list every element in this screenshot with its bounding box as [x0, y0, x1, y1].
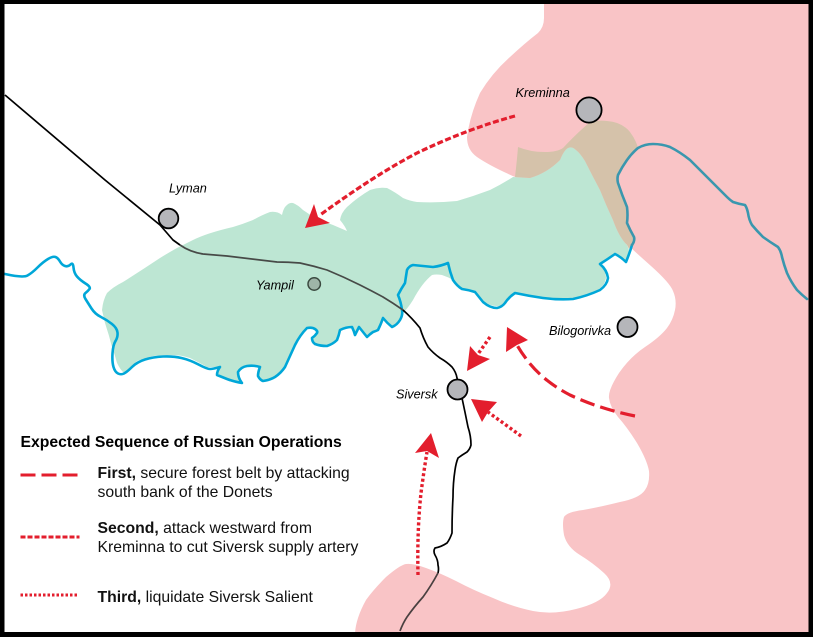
panel: forest belt [102, 147, 629, 382]
arrow: third, from southeast to Siversk [471, 399, 521, 436]
legend swatch: second [20, 536, 80, 538]
city label: Siversk: Siversk [396, 388, 438, 402]
city marker: Bilogorivka [618, 317, 638, 337]
city label: Yampil: Yampil [256, 278, 295, 292]
legend text: first: First, secure forest belt by attacking [98, 465, 350, 482]
Donets river, teal section over occupied area [618, 144, 807, 299]
city label: Lyman: Lyman [169, 182, 207, 196]
legend swatch: third [20, 594, 77, 596]
legend text: first: south bank of the Donets [98, 484, 273, 501]
legend text: second: Second, attack westward from [98, 520, 312, 537]
panel: Russian-held territory [355, 4, 809, 633]
arrow: third, from northeast to Siversk [467, 337, 490, 371]
arrow: third, from south to Siversk [415, 433, 439, 575]
city label: Kreminna: Kreminna [516, 86, 570, 100]
legend [20, 434, 358, 606]
city marker: Kreminna [576, 97, 602, 123]
legend text: third: Third, liquidate Siversk Salient [98, 589, 313, 606]
legend title: Expected Sequence of Russian Operations [20, 434, 342, 451]
arrow: first, attack toward south bank of the Donets [506, 327, 635, 416]
legend text: second: Kreminna to cut Siversk supply artery [98, 539, 358, 556]
arrow: second, westward from Kreminna [305, 116, 515, 228]
city marker: Siversk [448, 380, 468, 400]
Donets river, blue section [5, 245, 632, 383]
panel: overlap of forest belt and Russian-held territory [515, 121, 638, 249]
railway line [5, 95, 471, 631]
city marker: Lyman [159, 209, 178, 228]
city label: Bilogorivka: Bilogorivka [549, 324, 611, 338]
city marker: Yampil [308, 278, 320, 290]
legend swatch: first [20, 474, 80, 476]
